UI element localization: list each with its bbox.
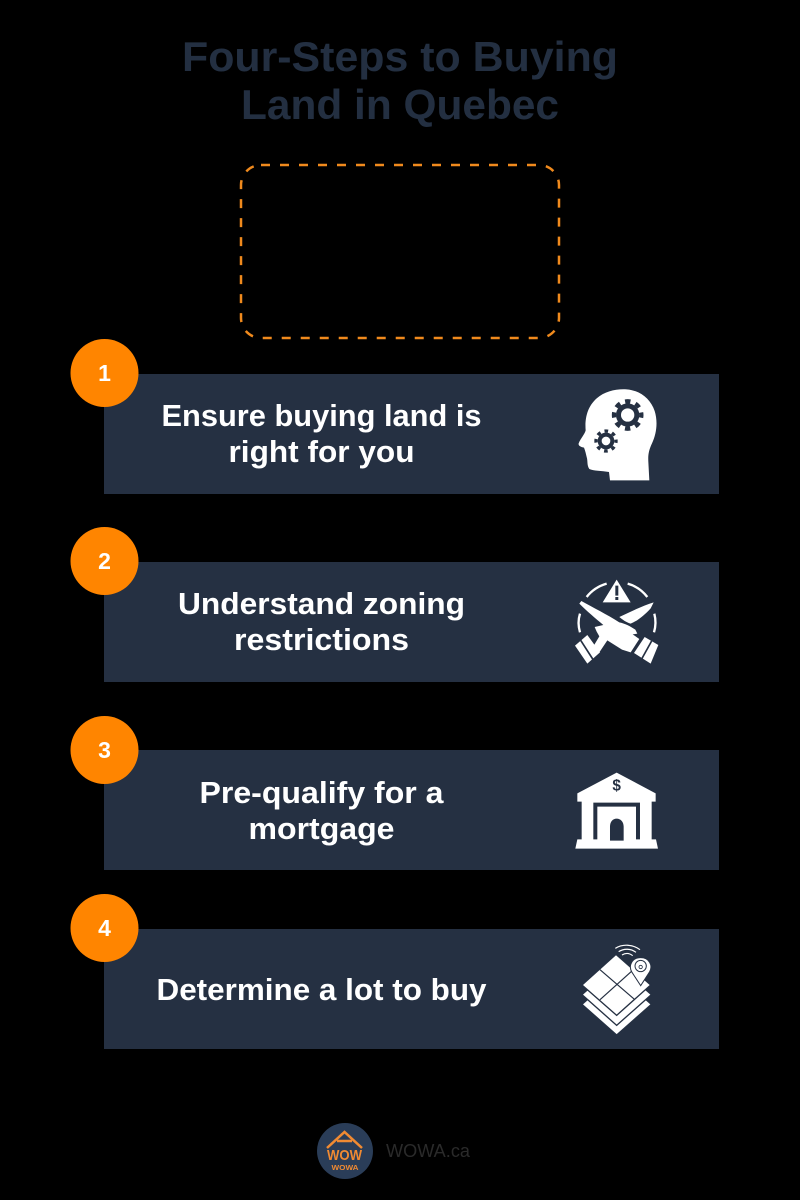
- step 1 number badge: [70, 339, 138, 407]
- icon: bank building: [575, 773, 658, 849]
- step 3 number badge: [70, 716, 138, 784]
- icon: bank building: $: [612, 777, 621, 794]
- icon: crossed hands with warning: [575, 580, 658, 664]
- site name: WOWA.ca: [386, 1140, 471, 1161]
- step 2 text: [178, 586, 465, 657]
- logo wordmark: WOWA: [332, 1163, 359, 1172]
- step 1 text: [162, 398, 482, 469]
- panel: step 2: [70, 527, 719, 682]
- title: Four-Steps to Buying: [182, 33, 618, 80]
- panel: step 3: [70, 716, 719, 870]
- step 2 number badge: [70, 527, 138, 595]
- step 2 number badge: 2: [98, 548, 111, 574]
- step 3 number badge: 3: [98, 737, 111, 763]
- step 3 text: Pre-qualify for a: [200, 775, 444, 810]
- panel: step 1: [70, 339, 719, 494]
- icon: head with gears: [579, 389, 657, 480]
- title: Land in Quebec: [241, 81, 559, 128]
- step 2 text: Understand zoning: [178, 586, 465, 621]
- image placeholder frame: [241, 165, 559, 338]
- step 4 number badge: [70, 894, 138, 962]
- step 2 text: restrictions: [234, 622, 409, 657]
- step 1 number badge: 1: [98, 360, 111, 386]
- step 1 text: right for you: [228, 434, 414, 469]
- step 4 text: Determine a lot to buy: [156, 972, 487, 1007]
- title: [182, 33, 618, 128]
- icon: house: WOW: [327, 1147, 363, 1164]
- footer logo: [317, 1123, 471, 1179]
- icon: house: [327, 1132, 363, 1164]
- step 4 number badge: 4: [98, 915, 111, 941]
- panel: step 4: [70, 894, 719, 1049]
- step 3 text: [200, 775, 444, 846]
- step 1 text: Ensure buying land is: [162, 398, 482, 433]
- icon: land parcel layers with pin: [582, 945, 651, 1035]
- step 3 text: mortgage: [248, 811, 394, 846]
